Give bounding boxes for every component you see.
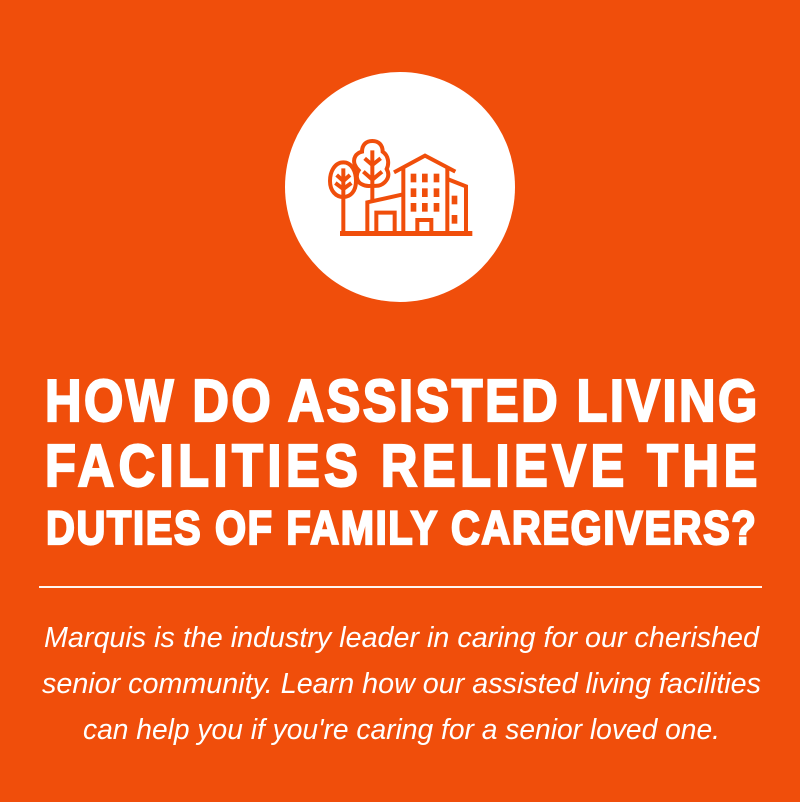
title: HOW DO ASSISTED LIVING [45, 367, 757, 434]
icon: building [340, 156, 472, 236]
title [45, 367, 757, 555]
title: DUTIES OF FAMILY CAREGIVERS? [46, 503, 756, 555]
body text: Marquis is the industry leader in caring for our cherished [44, 622, 760, 654]
body text: senior community. Learn how our assisted living facilities [42, 668, 761, 700]
icon: right tree [354, 141, 388, 201]
title: FACILITIES RELIEVE THE [45, 432, 757, 499]
icon: white circle with trees and building [285, 72, 515, 302]
body text [42, 622, 761, 746]
icon: left tree [330, 162, 356, 231]
body text: can help you if you're caring for a senior loved one. [83, 714, 720, 746]
